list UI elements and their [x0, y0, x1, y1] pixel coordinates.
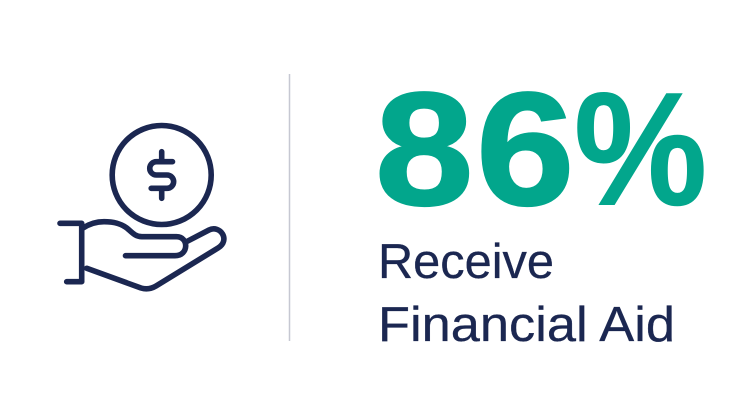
divider [288, 74, 290, 341]
dollar sign [150, 152, 174, 198]
coin [112, 126, 211, 224]
caption: Receive Financial Aid: Financial Aid [378, 298, 675, 352]
statistic: 86%: 6 [476, 59, 574, 239]
hand [60, 222, 224, 289]
caption: Receive Financial Aid [378, 235, 675, 352]
statistic: 86%: 8 [375, 59, 473, 239]
statistic: 86%: % [574, 58, 707, 239]
icon: hand holding dollar coin [60, 126, 224, 289]
statistic: 86% [375, 58, 707, 239]
caption: Receive Financial Aid: Receive [378, 235, 554, 289]
